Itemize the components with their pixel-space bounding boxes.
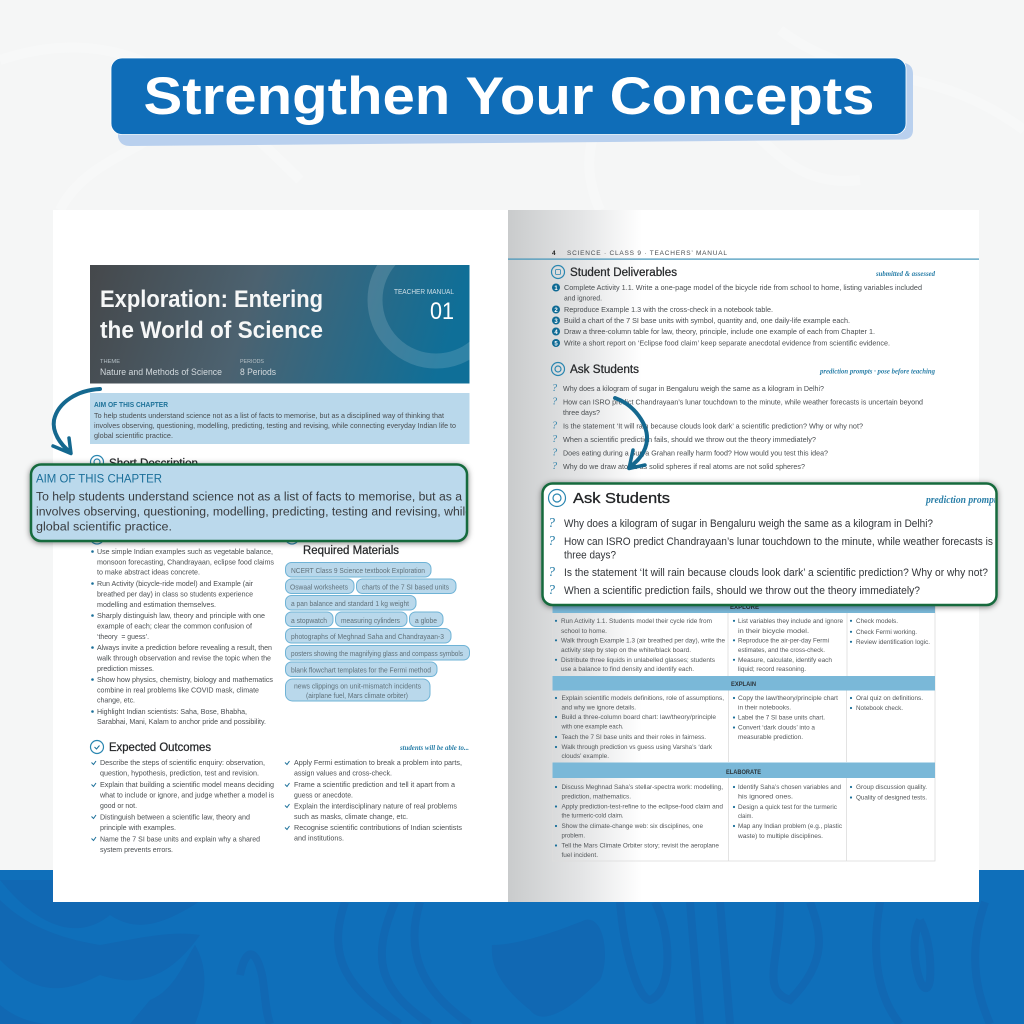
expected outcomes: Apply Fermi estimation to break a problem into parts,	[294, 758, 462, 767]
running header	[508, 250, 979, 260]
elaborate row: Quality of designed tests.	[856, 794, 927, 802]
elaborate row: claim.	[738, 813, 753, 820]
callout: ask students enlarged	[542, 484, 1024, 605]
running header: SCIENCE · CLASS 9 · TEACHERS’ MANUAL	[567, 250, 727, 257]
ask students list: ?	[552, 420, 557, 432]
ask students list: Does eating during a Surya Grahan really harm food? How would you test this idea?	[563, 448, 828, 458]
callout: ask students enlarged: Why does a kilogram of sugar in Bengaluru weigh the same as a kilogram in Delhi?	[564, 518, 933, 530]
expected outcomes: Explain that building a scientific model means deciding	[100, 780, 274, 789]
teaching tips list: prediction misses.	[97, 664, 154, 673]
expected outcomes: Expected Outcomes	[109, 742, 211, 754]
expected outcomes: Distinguish between a scientific law, theory and	[100, 812, 250, 822]
callout: ask students enlarged: ?	[548, 534, 555, 549]
chapter banner: 01	[430, 298, 454, 325]
title banner	[111, 58, 913, 146]
elaborate row: Show the climate-change web: six disciplines, one	[562, 823, 703, 830]
callout: ask students enlarged: Ask Students	[573, 490, 670, 507]
required materials: NCERT Class 9 Science textbook Exploration	[291, 568, 425, 575]
arrow: aim box to callout	[53, 389, 100, 454]
short description heading	[90, 456, 198, 470]
elaborate row: Group discussion quality.	[856, 784, 927, 791]
teaching tips list: combine in real problems like COVID mask, climate	[97, 686, 259, 694]
explore row: EXPLORE	[730, 604, 760, 611]
required materials: a stopwatch	[291, 618, 327, 625]
explore row: Reproduce the air-per-day Fermi	[738, 638, 829, 644]
ask students list: prediction prompts · pose before teaching	[819, 368, 935, 376]
teaching tips list: Show how physics, chemistry, biology and mathematics	[97, 675, 273, 684]
expected outcomes	[90, 740, 469, 854]
explain row: Notebook check.	[856, 705, 903, 712]
explore row: Measure, calculate, identify each	[738, 657, 832, 664]
banner box	[111, 58, 906, 134]
chapter banner: Nature and Methods of Science	[100, 367, 222, 377]
callout: aim of this chapter enlarged	[31, 464, 472, 541]
chapter banner: 8 Periods	[240, 367, 276, 377]
ask students list: ?	[552, 434, 557, 445]
explore row: Check Fermi working.	[856, 629, 917, 636]
elaborate row: Map any Indian problem (e.g., plastic	[738, 823, 843, 830]
explore row: activity step by step on the white/black board.	[561, 647, 691, 654]
student deliverables: and ignored.	[564, 294, 602, 302]
required materials: Required Materials	[303, 545, 399, 557]
ask students list: Why do we draw atoms as solid spheres if real atoms are not solid spheres?	[563, 462, 805, 471]
elaborate row: waste) to multiple disciplines.	[737, 833, 823, 840]
chapter banner: PERIODS	[240, 359, 264, 365]
gutter shadow	[508, 210, 642, 902]
ask students list: three days?	[563, 408, 600, 417]
aim of this chapter box: involves observing, questioning, modelling, predicting, testing and revising, while connecting everyday Indian life to	[94, 421, 456, 430]
running header: 4	[552, 250, 556, 257]
elaborate row: his ignored ones.	[738, 794, 793, 800]
banner shadow	[118, 63, 913, 146]
required materials: blank flowchart templates for the Fermi method	[291, 668, 431, 674]
panel: right manual page	[31, 210, 1024, 902]
expected outcomes: system prevents errors.	[100, 845, 173, 854]
required materials: measuring cylinders	[341, 618, 400, 625]
teaching tips list: walk through observation and revise the topic when the	[96, 654, 271, 662]
explore row	[552, 600, 935, 673]
chapter banner	[90, 265, 470, 384]
ask students list: How can ISRO predict Chandrayaan’s lunar touchdown to the minute, while weather forecasts is uncertain beyond	[563, 398, 923, 406]
aim of this chapter box: To help students understand science not as a list of facts to memorise, but as a disciplined way of thinking that	[94, 411, 444, 420]
expected outcomes: what to include or ignore, and judge whether a model is	[99, 790, 274, 800]
ask students list: Is the statement ‘It will rain because clouds look dark’ a scientific prediction? Why or why not?	[563, 422, 863, 430]
chapter banner: Exploration: Entering	[100, 286, 323, 313]
explain row: Explain scientific models definitions, role of assumptions,	[562, 695, 724, 702]
ask students list: Ask Students	[570, 364, 639, 376]
elaborate row: problem.	[562, 832, 585, 840]
required materials: Oswaal worksheets	[290, 584, 348, 592]
student deliverables: submitted & assessed	[875, 270, 935, 278]
callout: ask students enlarged: ?	[548, 565, 555, 580]
student deliverables: 2	[554, 308, 558, 314]
expected outcomes: Name the 7 SI base units and explain why a shared	[100, 834, 260, 844]
explain row: in their notebooks.	[738, 704, 791, 712]
required materials: news clippings on unit-mismatch incidents	[294, 684, 421, 690]
required materials: photographs of Meghnad Saha and Chandrayaan-3	[291, 634, 444, 641]
expected outcomes: Explain the interdisciplinary nature of real problems	[294, 802, 457, 810]
elaborate row: prediction, mathematics.	[562, 794, 631, 800]
page sheet	[53, 210, 509, 902]
required materials: (airplane fuel, Mars climate orbiter)	[306, 693, 408, 700]
expected outcomes: and institutions.	[294, 834, 344, 842]
chapter banner: THEME	[100, 359, 120, 365]
student deliverables	[552, 266, 935, 348]
expected outcomes: good or not.	[100, 801, 137, 810]
expected outcomes: principle with examples.	[100, 823, 176, 832]
aim of this chapter box: global scientific practice.	[94, 431, 173, 440]
explain row	[552, 676, 935, 760]
expected outcomes: such as masks, climate change, etc.	[294, 812, 408, 821]
expected outcomes: students will be able to...	[399, 744, 469, 752]
ask students list: ?	[552, 448, 557, 458]
required materials: a globe	[415, 618, 437, 625]
panel: left manual page	[53, 210, 509, 902]
callout: ask students enlarged: three days?	[564, 550, 616, 562]
explain row: EXPLAIN	[731, 681, 756, 688]
section icons behind callout	[90, 530, 299, 544]
ask students list: ?	[552, 396, 557, 408]
explain row: Label the 7 SI base units chart.	[738, 714, 825, 722]
elaborate row: Design a quick test for the turmeric	[738, 804, 838, 811]
expected outcomes: assign values and cross-check.	[294, 768, 392, 778]
ask students list: ?	[552, 383, 557, 394]
teaching tips list: Sharply distinguish law, theory and principle with one	[97, 611, 265, 620]
explain row: Build a three-column board chart: law/theory/principle	[562, 714, 716, 721]
student deliverables: 1	[554, 286, 558, 292]
expected outcomes: guess or anecdote.	[294, 790, 353, 800]
explain row: with one example each.	[561, 724, 624, 730]
teaching tips list: modelling and estimation themselves.	[97, 600, 216, 609]
elaborate row: Tell the Mars Climate Orbiter story; revisit the aeroplane	[562, 842, 719, 850]
chapter banner: TEACHER MANUAL	[394, 287, 454, 296]
expected outcomes: Recognise scientific contributions of Indian scientists	[294, 823, 462, 832]
page sheet	[508, 210, 979, 902]
required materials: charts of the 7 SI based units	[362, 584, 449, 592]
aim of this chapter box	[90, 393, 470, 444]
explain row: Oral quiz on definitions.	[856, 695, 923, 702]
short description heading: Short Description	[109, 458, 198, 470]
ask students list: When a scientific prediction fails, should we throw out the theory immediately?	[563, 435, 816, 444]
callout: ask students enlarged: ?	[548, 583, 555, 598]
callout: ask students enlarged: When a scientific prediction fails, should we throw out the theory immediately?	[564, 585, 920, 597]
callout: aim of this chapter enlarged: global scientific practice.	[36, 522, 172, 534]
callout: aim of this chapter enlarged: To help students understand science not as a list of facts to memorise, but as a	[36, 492, 463, 504]
elaborate row	[552, 762, 935, 859]
explore row: Check models.	[856, 618, 898, 625]
callout: ask students enlarged: Is the statement ‘It will rain because clouds look dark’ a scientific prediction? Why or why not?	[564, 567, 988, 579]
elaborate row: Identify Saha’s chosen variables and	[738, 784, 841, 791]
explain row: Walk through prediction vs guess using Varsha’s ‘dark	[562, 744, 713, 751]
teaching plan table	[552, 600, 935, 861]
expected outcomes: Describe the steps of scientific enquiry: observation,	[100, 758, 265, 767]
teaching tips list: Run Activity (bicycle-ride model) and Example (air	[97, 579, 254, 588]
callout: aim of this chapter enlarged: AIM OF THIS CHAPTER	[36, 474, 162, 486]
explain row: Convert ‘dark clouds’ into a	[738, 724, 815, 732]
student deliverables: 4	[554, 330, 558, 336]
explain row: and why we ignore details.	[562, 704, 636, 712]
expected outcomes: Frame a scientific prediction and tell it apart from a	[294, 780, 456, 789]
expected outcomes: question, hypothesis, prediction, test and revision.	[100, 768, 259, 778]
explain row: Copy the law/theory/principle chart	[738, 695, 838, 702]
explain row: Teach the 7 SI base units and their roles in fairness.	[562, 734, 706, 741]
student deliverables: Reproduce Example 1.3 with the cross-check in a notebook table.	[564, 305, 773, 314]
ask students list: Why does a kilogram of sugar in Bengaluru weigh the same as a kilogram in Delhi?	[563, 384, 824, 393]
ask students list: ?	[552, 461, 557, 472]
teaching tips list: to make abstract ideas concrete.	[97, 568, 200, 576]
teaching tips list: Highlight Indian scientists: Saha, Bose, Bhabha,	[97, 707, 247, 716]
teaching tips list: ‘theory = guess’.	[97, 632, 149, 641]
explore row: Walk through Example 1.3 (air breathed per day), write the	[561, 638, 725, 644]
student deliverables: Complete Activity 1.1. Write a one-page model of the bicycle ride from school to home, listing variables included	[564, 283, 922, 292]
student deliverables: Write a short report on ‘Eclipse food claim’ keep separate anecdotal evidence from scientific evidence.	[564, 338, 890, 348]
explore row: school to home.	[561, 628, 607, 635]
student deliverables: Build a chart of the 7 SI base units with symbol, quantity and, one daily-life example each.	[564, 316, 850, 325]
explain row: measurable prediction.	[738, 734, 803, 741]
callout: aim of this chapter enlarged: involves observing, questioning, modelling, predicting, testing and revising, while	[36, 506, 472, 518]
explore row: liquid; record reasoning.	[738, 666, 806, 673]
elaborate row: Apply prediction-test-refine to the eclipse-food claim and	[562, 804, 723, 810]
teaching tips list: change, etc.	[97, 696, 135, 704]
elaborate row: ELABORATE	[726, 769, 762, 776]
teaching tips list: example of each; clear the common confusion of	[97, 622, 253, 630]
aim of this chapter box: AIM OF THIS CHAPTER	[94, 400, 169, 409]
explore row: use a balance to find density and identify each.	[561, 666, 694, 673]
required materials: posters showing the magnifying glass and compass symbols	[291, 651, 463, 658]
icon: ask students	[548, 490, 566, 506]
explore row: Distribute three liquids in unlabelled glasses; students	[561, 657, 716, 664]
student deliverables: Student Deliverables	[570, 267, 677, 279]
teaching tips list: monsoon forecasting, Chandrayaan, eclipse food claims	[97, 558, 274, 566]
elaborate row: Discuss Meghnad Saha’s stellar-spectra work: modelling,	[562, 784, 723, 791]
teaching tips list: Use simple Indian examples such as vegetable balance,	[97, 547, 273, 556]
teaching tips list: breathed per day) in class so students experience	[97, 590, 253, 598]
teaching tips list: Always invite a prediction before revealing a result, then	[97, 643, 272, 652]
explore row: in their bicycle model.	[738, 628, 809, 635]
elaborate row: the turmeric-cold claim.	[562, 812, 624, 820]
chapter banner: the World of Science	[100, 317, 323, 344]
teaching tips list	[91, 547, 274, 726]
explain row: clouds’ example.	[562, 753, 609, 760]
student deliverables: Draw a three-column table for law, theory, principle, include one example of each from Chapter 1.	[564, 327, 875, 336]
explore row: estimates, and the cross-check.	[738, 647, 825, 654]
teaching tips list: Sarabhai, Mani, Kalam to anchor pride and possibility.	[97, 717, 266, 726]
required materials	[286, 545, 470, 701]
explore row: Review identification logic.	[856, 639, 930, 646]
arrow: ask students to callout	[615, 398, 647, 468]
explore row: List variables they include and ignore	[738, 618, 843, 625]
callout: ask students enlarged: ?	[548, 516, 555, 531]
required materials: a pan balance and standard 1 kg weight	[291, 601, 409, 608]
icon: check circle	[90, 740, 104, 754]
background: blue band with wave pattern	[0, 870, 1024, 1024]
student deliverables: 3	[554, 319, 558, 325]
elaborate row: fuel incident.	[562, 852, 598, 859]
student deliverables: 5	[554, 341, 558, 347]
explore row: Run Activity 1.1. Students model their cycle ride from	[561, 618, 712, 625]
heading: Strengthen Your Concepts	[144, 67, 874, 126]
ask students list	[552, 362, 935, 472]
